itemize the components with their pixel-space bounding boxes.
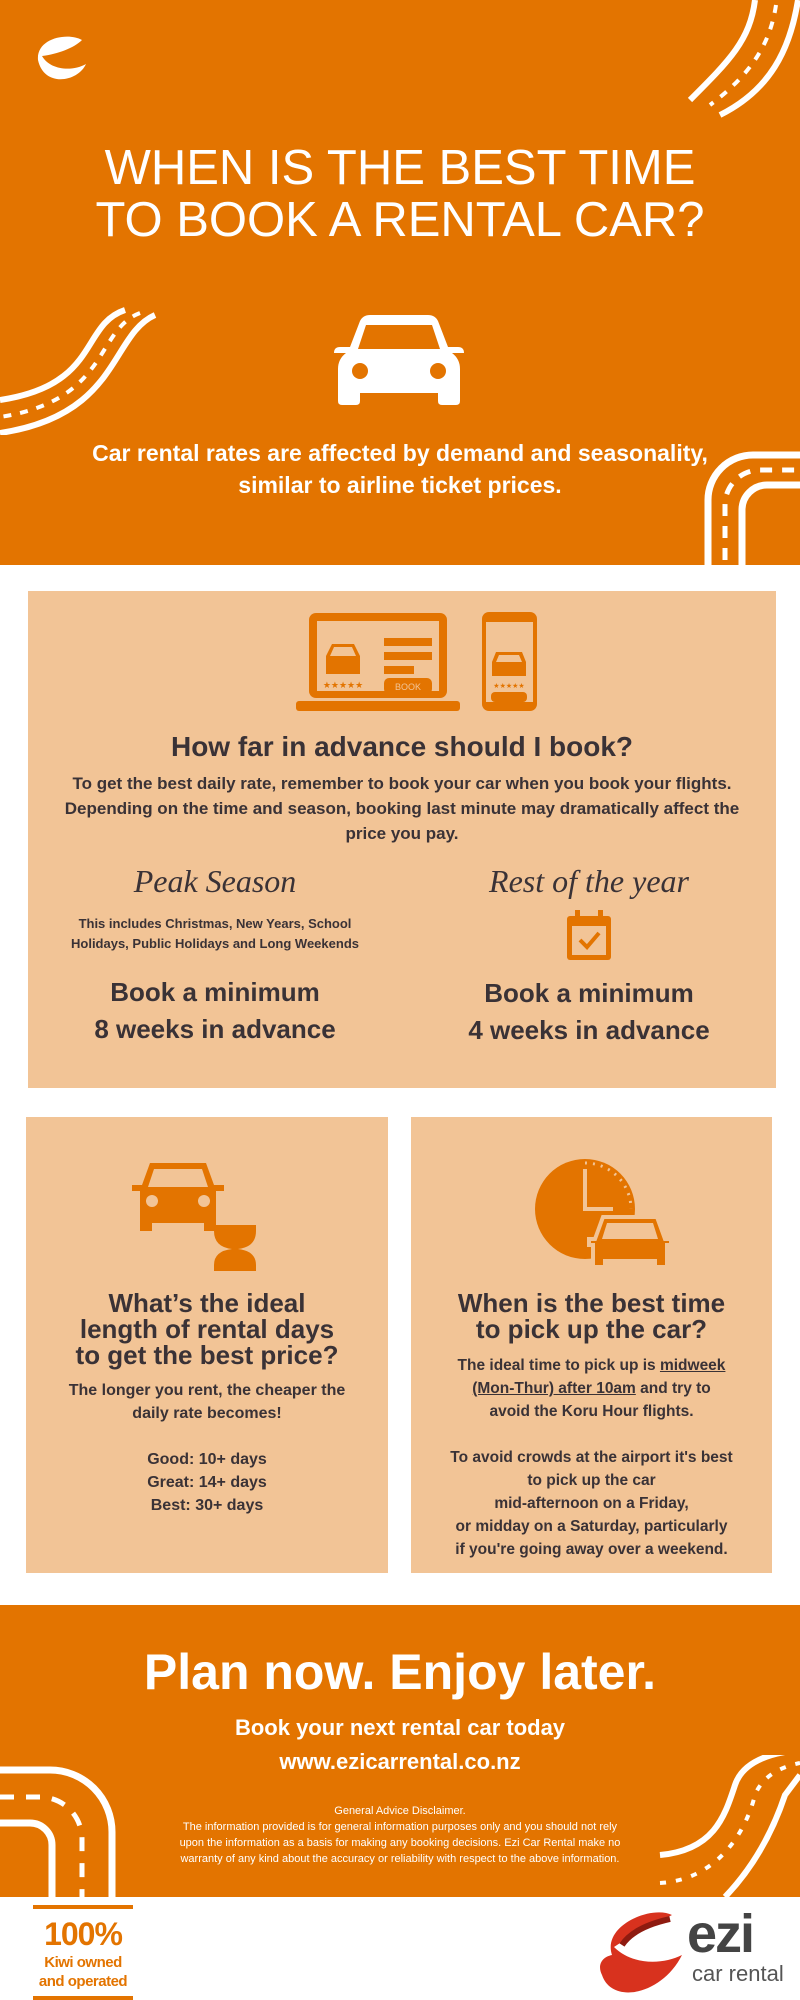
title: WHEN IS THE BEST TIME [105,141,695,195]
road decoration left [0,307,156,435]
title [95,141,705,247]
column: rest of year: 4 weeks in advance [468,1015,710,1045]
icon: laptop: BOOK [395,682,421,692]
body text [65,774,739,843]
column: peak season: Holidays, Public Holidays and Long Weekends [71,936,359,951]
body text: price you pay. [345,824,459,843]
logo: ezi car rental: ezi [687,1904,753,1964]
body: avoid the Koru Hour flights. [489,1403,694,1420]
header band [0,0,800,565]
body: The longer you rent, the cheaper the [69,1382,345,1399]
body [68,1382,345,1514]
body: to pick up the car [527,1472,656,1489]
footer band [0,1605,800,1897]
column: peak season: This includes Christmas, New Years, School [79,916,351,931]
badge: 100% kiwi owned [33,1905,133,2000]
panel: how far in advance [28,591,776,1088]
panel: pick up time [411,1117,772,1573]
road decoration right [660,1755,800,1897]
body text: Depending on the time and season, booking last minute may dramatically affect the [65,799,739,818]
body: or midday on a Saturday, particularly [456,1518,727,1535]
heading [76,1288,338,1370]
icon: car [334,315,464,405]
body: (Mon-Thur) after 10am and try to [472,1380,711,1397]
heading: How far in advance should I book? [171,731,633,762]
title: TO BOOK A RENTAL CAR? [95,193,705,247]
disclaimer: warranty of any kind about the accuracy or reliability with respect to the above information. [180,1853,620,1865]
column: rest of year: Book a minimum [484,978,694,1008]
body: if you're going away over a weekend. [455,1541,728,1558]
column: rest of year: Rest of the year [489,863,689,899]
column: peak season [71,863,359,1044]
heading: plan now: Plan now. Enjoy later. [144,1644,656,1700]
logo: ezi car rental [600,1904,784,1992]
disclaimer [180,1805,620,1865]
heading: When is the best time [458,1288,725,1318]
disclaimer: upon the information as a basis for making any booking decisions. Ezi Car Rental make no [180,1837,620,1849]
cta text: www.ezicarrental.co.nz [279,1749,521,1774]
icon: phone [482,612,537,711]
disclaimer: General Advice Disclaimer. [334,1805,466,1817]
cta text [235,1715,565,1774]
icon: calendar [567,910,611,960]
body: daily rate becomes! [132,1405,282,1422]
heading: to pick up the car? [476,1314,707,1344]
body: To avoid crowds at the airport it's best [450,1449,733,1466]
road decoration top right [688,0,800,118]
road decoration left [0,1766,116,1897]
subtitle [92,440,708,498]
heading: length of rental days [80,1314,334,1344]
column: peak season: Peak Season [134,863,296,899]
body text: To get the best daily rate, remember to book your car when you book your flights. [72,774,732,793]
badge: 100% kiwi owned: Kiwi owned [44,1954,122,1971]
body: mid-afternoon on a Friday, [494,1495,689,1512]
cta text: Book your next rental car today [235,1715,565,1740]
column: rest of year [468,863,710,1045]
icon: laptop: ★★★★★ [323,680,363,690]
heading: to get the best price? [76,1340,338,1370]
disclaimer: The information provided is for general information purposes only and you should not rely [183,1821,617,1833]
icon: laptop [296,613,460,711]
road decoration right [704,452,800,565]
body: Good: 10+ days [147,1451,267,1468]
icon: clock with car [535,1159,669,1265]
heading [458,1288,725,1344]
body: Best: 30+ days [151,1497,263,1514]
icon: car with hourglass [132,1163,256,1271]
body [450,1357,733,1558]
subtitle: Car rental rates are affected by demand and seasonality, [92,440,708,466]
icon: phone: ★★★★★ [493,682,525,690]
column: peak season: Book a minimum [110,977,320,1007]
body: The ideal time to pick up is midweek [458,1357,725,1374]
logo: ezi car rental: car rental [692,1961,784,1986]
subtitle: similar to airline ticket prices. [238,472,562,498]
panel: rental length [26,1117,388,1573]
body: Great: 14+ days [147,1474,267,1491]
logo: e [38,36,86,80]
column: peak season: 8 weeks in advance [94,1014,336,1044]
heading: What’s the ideal [109,1288,305,1318]
badge: 100% kiwi owned: 100% [44,1916,122,1952]
badge: 100% kiwi owned: and operated [39,1973,127,1990]
